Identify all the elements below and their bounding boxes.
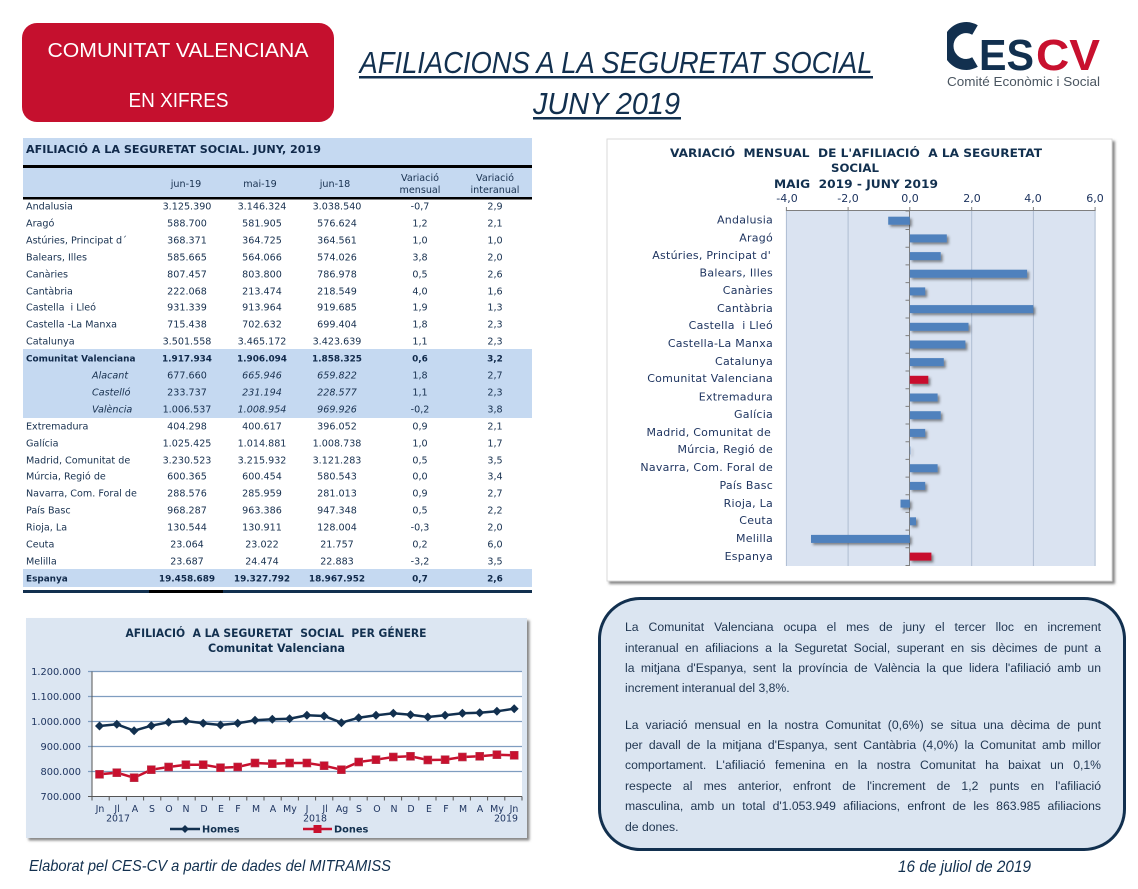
chart title: SOCIAL <box>831 161 880 175</box>
panel: bar chart variació mensual <box>607 139 1112 581</box>
row: Cantàbria: 4,0 <box>412 286 428 298</box>
y axis labels: 700.000 <box>40 792 81 803</box>
text panel: comentari <box>598 597 1126 851</box>
category labels: Astúries, Principat d' <box>652 249 771 262</box>
x axis labels: Jl <box>113 804 120 815</box>
row: Andalusia <box>26 202 503 212</box>
title <box>358 45 873 121</box>
x axis labels: N <box>182 804 190 815</box>
table header: interanual <box>471 185 519 196</box>
x axis labels: Jl <box>321 804 328 815</box>
x axis labels: 2019 <box>494 814 518 824</box>
paragraph 2 <box>625 718 1101 834</box>
row: Comunitat Valenciana: Comunitat Valenciana <box>26 354 135 364</box>
row: Castella i Lleó: Castella i Lleó <box>26 302 96 314</box>
row: País Basc: 963.386 <box>242 506 282 516</box>
row: Alacant: Alacant <box>91 370 129 382</box>
category labels: Madrid, Comunitat de <box>646 426 771 439</box>
row: Múrcia: 0,0 <box>412 472 428 482</box>
x axis labels: A <box>132 804 139 815</box>
row: Múrcia <box>26 470 503 482</box>
row: València: 969.926 <box>317 404 357 416</box>
logo: CES CV <box>947 28 1101 89</box>
title: AFILIACIONS A LA SEGURETAT SOCIAL <box>358 45 873 80</box>
row: València: 1.008.954 <box>238 404 286 416</box>
row: Espanya: 18.967.952 <box>309 574 365 584</box>
row: Alacant: 677.660 <box>167 370 207 382</box>
row: Astúries: 1,0 <box>412 236 428 246</box>
row: Madrid: 3.230.523 <box>163 456 211 466</box>
top axis: -4,0 <box>776 192 798 205</box>
row: Extremadura <box>26 422 503 432</box>
row: Alacant: 2,7 <box>487 370 503 382</box>
row: Catalunya: 3.423.639 <box>313 336 361 348</box>
category labels: Galícia <box>734 408 773 421</box>
category labels: Espanya <box>725 550 773 563</box>
row: Melilla: 23.687 <box>170 556 204 568</box>
row: Espanya: 19.327.792 <box>234 574 290 584</box>
x axis labels: My <box>490 804 504 815</box>
row: Alacant: 659.822 <box>317 370 357 382</box>
paragraph 2: respecte al mes anterior, enfront de l'increment de 1,2 punts en l'afiliació <box>625 779 1101 793</box>
row: País Basc: 0,5 <box>412 506 428 516</box>
y axis labels: 800.000 <box>40 767 81 778</box>
line: Homes <box>100 709 514 731</box>
row: Castella-La Manxa: 715.438 <box>167 320 207 330</box>
x axis labels <box>95 804 518 824</box>
category labels: Castella-La Manxa <box>668 337 773 350</box>
panel: line chart afiliació per gènere <box>26 618 527 838</box>
row: Andalusia: 2,9 <box>487 202 503 212</box>
row: Alacant <box>91 370 503 382</box>
table: afiliació per comunitat <box>23 138 532 593</box>
paragraph 2: per davall de la mitjana d'Espanya, sent Cantàbria (4,0%) la Comunitat amb millor <box>625 738 1101 752</box>
x axis labels: E <box>218 804 224 815</box>
row: Navarra: Navarra, Com. Foral de <box>26 488 137 500</box>
logo: CES CV: ES <box>979 31 1034 80</box>
row: Navarra: 281.013 <box>317 488 357 500</box>
row: Castella-La Manxa: 702.632 <box>242 320 282 330</box>
top axis: -2,0 <box>837 192 859 205</box>
x axis labels: N <box>390 804 398 815</box>
footer source: Elaborat pel CES-CV a partir de dades del MITRAMISS <box>29 858 391 875</box>
table header: Variació <box>401 172 439 184</box>
chart title: MAIG 2019 - JUNY 2019 <box>774 177 938 191</box>
row: Catalunya: 2,3 <box>487 336 503 348</box>
category labels: Múrcia, Regió de <box>677 443 773 456</box>
row: Cantàbria: 222.068 <box>167 286 207 298</box>
paragraph 1: La Comunitat Valenciana ocupa el mes de juny el tercer lloc en increment <box>625 620 1101 634</box>
top axis: 0,0 <box>901 192 919 205</box>
row: Melilla: 24.474 <box>245 556 279 568</box>
row: Rioja: 2,0 <box>487 522 503 534</box>
x axis labels: Jn <box>95 804 104 815</box>
table header: Variació <box>476 172 514 184</box>
row: Extremadura: 396.052 <box>317 422 357 432</box>
top axis: 2,0 <box>963 192 981 205</box>
row: Canàries: 2,6 <box>487 270 503 280</box>
row: Astúries: 368.371 <box>167 236 207 246</box>
row: Catalunya <box>26 336 503 348</box>
x axis labels: M <box>252 804 260 815</box>
row: Castelló: 1,1 <box>412 388 428 398</box>
row: Castella-La Manxa: 2,3 <box>487 320 503 330</box>
category labels: Balears, Illes <box>700 266 773 280</box>
row: Castelló <box>92 386 503 398</box>
row: Madrid: 3.215.932 <box>238 456 286 466</box>
row: Rioja <box>26 522 503 534</box>
row: Catalunya: 3.501.558 <box>163 336 211 348</box>
category labels: Canàries <box>723 284 773 297</box>
row: Ceuta: 23.022 <box>245 540 279 550</box>
y axis labels <box>31 667 81 803</box>
row: Navarra <box>26 488 503 500</box>
row: Ceuta: 23.064 <box>170 540 204 550</box>
row: Extremadura: 404.298 <box>167 422 207 432</box>
row: Madrid <box>26 456 503 466</box>
row: Aragó <box>26 218 503 230</box>
row: Andalusia: 3.038.540 <box>313 202 361 212</box>
axes <box>88 672 522 800</box>
row: Madrid: 0,5 <box>412 456 428 466</box>
chart title <box>670 145 1042 191</box>
row: País Basc: País Basc <box>26 504 71 516</box>
row: Ceuta: 21.757 <box>320 540 354 550</box>
row: Espanya: 19.458.689 <box>159 574 215 584</box>
row: Comunitat Valenciana: 1.858.325 <box>312 354 362 364</box>
row: Galícia: 1.008.738 <box>313 438 361 450</box>
row: Balears <box>26 252 503 264</box>
row: Canàries: 0,5 <box>412 270 428 280</box>
row: Ceuta: 0,2 <box>412 540 428 550</box>
row: Madrid: Madrid, Comunitat de <box>26 456 130 466</box>
row: València <box>92 404 503 416</box>
row: Aragó: 2,1 <box>487 218 503 230</box>
row: Comunitat Valenciana: 0,6 <box>412 354 428 364</box>
chart title: AFILIACIÓ A LA SEGURETAT SOCIAL PER GÉNERE <box>126 627 426 640</box>
category labels: Cantàbria <box>717 302 773 315</box>
row: Madrid: 3.121.283 <box>313 456 361 466</box>
x axis labels: 2018 <box>303 814 327 824</box>
row: Rioja: Rioja, La <box>26 522 67 534</box>
row: Castella i Lleó: 1,9 <box>412 302 428 314</box>
legend: Dones <box>334 824 368 836</box>
row: Espanya <box>26 574 503 584</box>
y axis labels: 1.000.000 <box>31 717 81 728</box>
row: Cantàbria <box>26 286 503 298</box>
row: Ceuta <box>26 540 503 550</box>
title: JUNY 2019 <box>532 86 680 121</box>
row: Múrcia: 580.543 <box>317 472 357 482</box>
row: Extremadura: Extremadura <box>26 422 88 432</box>
row: Andalusia: 3.146.324 <box>238 202 286 212</box>
row: País Basc: 947.348 <box>317 506 357 516</box>
x axis labels: S <box>356 804 362 815</box>
row: Castella i Lleó: 919.685 <box>317 302 357 314</box>
row: Astúries: Astúries, Principat d´ <box>26 234 127 246</box>
table header: jun-19 <box>170 179 201 190</box>
row: Galícia: 1.025.425 <box>163 438 211 450</box>
row: Galícia: 1,0 <box>412 438 428 450</box>
row: Castella i Lleó: 1,3 <box>487 302 503 314</box>
row: Extremadura: 0,9 <box>412 422 428 432</box>
row: Andalusia: 3.125.390 <box>163 202 211 212</box>
table header: mai-19 <box>243 179 277 190</box>
x axis labels: D <box>407 804 415 815</box>
x axis labels: S <box>149 804 155 815</box>
row: Castelló: Castelló <box>92 386 131 398</box>
row: Melilla: 3,5 <box>487 556 503 568</box>
category labels: Comunitat Valenciana <box>647 372 773 385</box>
category labels: Andalusia <box>717 214 773 226</box>
row: Múrcia: 600.454 <box>242 472 282 482</box>
category labels: Extremadura <box>699 390 773 404</box>
row: Balears: 574.026 <box>317 252 357 264</box>
paragraph 1: interanual en afiliacions a la Seguretat Social, superant en sis dècimes de punt a <box>625 641 1101 655</box>
x axis labels: My <box>283 804 297 815</box>
row: Cantàbria: Cantàbria <box>26 286 73 298</box>
row: Castelló: 2,3 <box>487 388 503 398</box>
row: Aragó: 1,2 <box>412 218 428 230</box>
bars <box>811 217 1033 561</box>
row: Aragó: 581.905 <box>242 218 282 230</box>
row: Navarra: 2,7 <box>487 488 503 500</box>
row: Castelló: 228.577 <box>317 388 358 398</box>
row: Astúries: 364.561 <box>317 236 357 246</box>
row: Galícia: 1,7 <box>487 438 503 450</box>
x axis labels: O <box>373 804 381 815</box>
row: Balears: 564.066 <box>242 252 282 264</box>
chart title: VARIACIÓ MENSUAL DE L'AFILIACIÓ A LA SEGURETAT <box>670 145 1042 160</box>
x axis labels: F <box>235 804 241 815</box>
paragraph 1: increment interanual del 3,8%. <box>625 681 790 695</box>
row: País Basc: 2,2 <box>487 506 503 516</box>
chart title <box>126 627 426 655</box>
paragraph 2: comportament. L'afiliació femenina en la nostra Comunitat ha baixat un 0,1% <box>625 758 1101 772</box>
row: Alacant: 665.946 <box>242 370 282 382</box>
legend: Homes <box>202 824 240 836</box>
row: Castella i Lleó: 913.964 <box>242 302 282 314</box>
row: Castella i Lleó <box>26 302 503 314</box>
top axis: 4,0 <box>1024 192 1042 205</box>
paragraph 2: masculina, amb un total d'1.053.949 afiliacions, enfront de les 863.985 afiliacions <box>625 799 1101 813</box>
row: Ceuta: 6,0 <box>487 540 503 550</box>
logo: CES CV: Comité Econòmic i Social <box>947 74 1100 89</box>
chart title: Comunitat Valenciana <box>208 642 345 655</box>
row: Alacant: 1,8 <box>412 370 428 382</box>
footer date: 16 de juliol de 2019 <box>898 858 1031 876</box>
table title: AFILIACIÓ A LA SEGURETAT SOCIAL. JUNY, 2019 <box>26 143 321 156</box>
badge: Comunitat Valenciana en xifres: EN XIFRES <box>128 90 228 112</box>
vertical axis <box>906 210 910 566</box>
row: Comunitat Valenciana: 1.917.934 <box>162 354 212 364</box>
row: Astúries: 1,0 <box>487 236 503 246</box>
x axis labels: Jn <box>509 804 518 815</box>
row: Castella-La Manxa: 1,8 <box>412 320 428 330</box>
row: Andalusia: -0,7 <box>411 202 429 212</box>
row: Melilla <box>26 556 503 568</box>
row: Extremadura: 2,1 <box>487 422 503 432</box>
row: Aragó: 588.700 <box>167 218 207 230</box>
row: Astúries <box>26 234 503 246</box>
x axis labels: J <box>305 804 308 815</box>
row: Castella-La Manxa: 699.404 <box>317 320 357 330</box>
row: Comunitat Valenciana <box>26 354 503 364</box>
row: Cantàbria: 213.474 <box>242 286 282 298</box>
top axis: 6,0 <box>1086 192 1104 205</box>
row: Múrcia: Múrcia, Regió de <box>26 470 106 482</box>
row: Catalunya: Catalunya <box>26 336 75 348</box>
row: Espanya: Espanya <box>26 574 68 584</box>
x axis labels: O <box>165 804 173 815</box>
row: Comunitat Valenciana: 3,2 <box>487 354 503 364</box>
row: Catalunya: 1,1 <box>412 336 428 348</box>
paragraph 2: de dones. <box>625 820 679 834</box>
category labels: Melilla <box>736 532 773 545</box>
x axis labels: F <box>443 804 449 815</box>
row: Espanya: 0,7 <box>412 574 428 584</box>
row: Aragó: 576.624 <box>317 218 357 230</box>
x axis labels: 2017 <box>106 814 130 824</box>
row: Rioja: -0,3 <box>411 522 429 534</box>
row: Canàries: 807.457 <box>167 270 207 280</box>
x axis labels: E <box>426 804 432 815</box>
row: Navarra: 288.576 <box>167 488 207 500</box>
table header <box>170 172 519 196</box>
row: Navarra: 285.959 <box>242 488 282 500</box>
row: València: València <box>92 404 132 416</box>
row: Balears: 585.665 <box>167 252 207 264</box>
row: Balears: 2,0 <box>487 252 503 264</box>
y axis labels: 1.100.000 <box>31 692 81 703</box>
row: Castella-La Manxa <box>26 320 503 330</box>
row: Castella-La Manxa: Castella -La Manxa <box>26 320 117 330</box>
x axis labels: D <box>200 804 208 815</box>
row: Castella i Lleó: 931.339 <box>167 302 207 314</box>
top axis <box>776 192 1104 210</box>
paragraph 1 <box>625 620 1102 695</box>
row: Astúries: 364.725 <box>242 236 282 246</box>
row: Múrcia: 3,4 <box>487 472 503 482</box>
row: València: 1.006.537 <box>163 404 211 416</box>
row: Canàries <box>26 268 503 280</box>
row: País Basc <box>26 504 503 516</box>
row: Catalunya: 3.465.172 <box>238 336 286 348</box>
row: Aragó: Aragó <box>26 218 54 230</box>
row: Balears: Balears, Illes <box>26 252 87 264</box>
badge: Comunitat Valenciana en xifres: COMUNITAT VALENCIANA <box>48 40 309 62</box>
paragraph 2: La variació mensual en la nostra Comunitat (0,6%) se situa una dècima de punt <box>625 718 1101 732</box>
row: Melilla: -3,2 <box>411 556 429 568</box>
row: Comunitat Valenciana: 1.906.094 <box>237 354 287 364</box>
category labels: Aragó <box>739 232 773 244</box>
row: Madrid: 3,5 <box>487 456 503 466</box>
row: Andalusia: Andalusia <box>26 202 73 212</box>
row: Rioja: 130.544 <box>167 522 207 534</box>
category labels: Rioja, La <box>724 497 773 510</box>
x axis labels: Ag <box>336 804 348 815</box>
row: País Basc: 968.287 <box>167 506 207 516</box>
badge: Comunitat Valenciana en xifres <box>22 23 334 122</box>
row: València: 3,8 <box>487 404 503 416</box>
y axis labels: 900.000 <box>40 742 81 753</box>
category labels <box>640 214 773 563</box>
row: Canàries: 803.800 <box>242 270 282 280</box>
row: Múrcia: 600.365 <box>167 472 207 482</box>
row: Canàries: Canàries <box>26 268 68 280</box>
row: Cantàbria: 1,6 <box>487 286 503 298</box>
x axis labels: A <box>477 804 484 815</box>
row: Ceuta: Ceuta <box>26 540 54 550</box>
category labels: Catalunya <box>715 355 773 368</box>
row: Melilla: 22.883 <box>320 556 354 568</box>
row: Canàries: 786.978 <box>317 270 357 280</box>
category labels: Navarra, Com. Foral de <box>640 461 773 474</box>
row: Rioja: 128.004 <box>317 522 357 534</box>
row: Rioja: 130.911 <box>242 522 282 534</box>
table header: jun-18 <box>319 179 350 190</box>
row: Galícia: Galícia <box>26 438 58 450</box>
category labels: País Basc <box>720 479 773 492</box>
x axis labels: A <box>270 804 277 815</box>
category labels: Ceuta <box>739 514 773 527</box>
row: Castelló: 231.194 <box>242 388 282 398</box>
row: Balears: 3,8 <box>412 252 428 264</box>
table header: mensual <box>400 185 440 196</box>
x axis labels: M <box>459 804 467 815</box>
paragraph 1: la mitjana d'Espanya, sent la província de València la que lidera l'afiliació amb un <box>625 661 1101 675</box>
legend <box>170 824 368 836</box>
row: Navarra: 0,9 <box>412 488 428 500</box>
row: Galícia <box>26 438 503 450</box>
y axis labels: 1.200.000 <box>31 667 81 678</box>
row: Galícia: 1.014.881 <box>238 438 286 450</box>
line: Dones <box>100 755 514 778</box>
row: Melilla: Melilla <box>26 556 57 568</box>
row: València: -0,2 <box>411 404 429 416</box>
row: Castelló: 233.737 <box>167 388 207 398</box>
category labels: Castella i Lleó <box>689 319 773 332</box>
row: Espanya: 2,6 <box>487 574 503 584</box>
row: Cantàbria: 218.549 <box>317 286 357 298</box>
logo: CES CV: CV <box>1036 31 1101 80</box>
row: Extremadura: 400.617 <box>242 422 282 432</box>
